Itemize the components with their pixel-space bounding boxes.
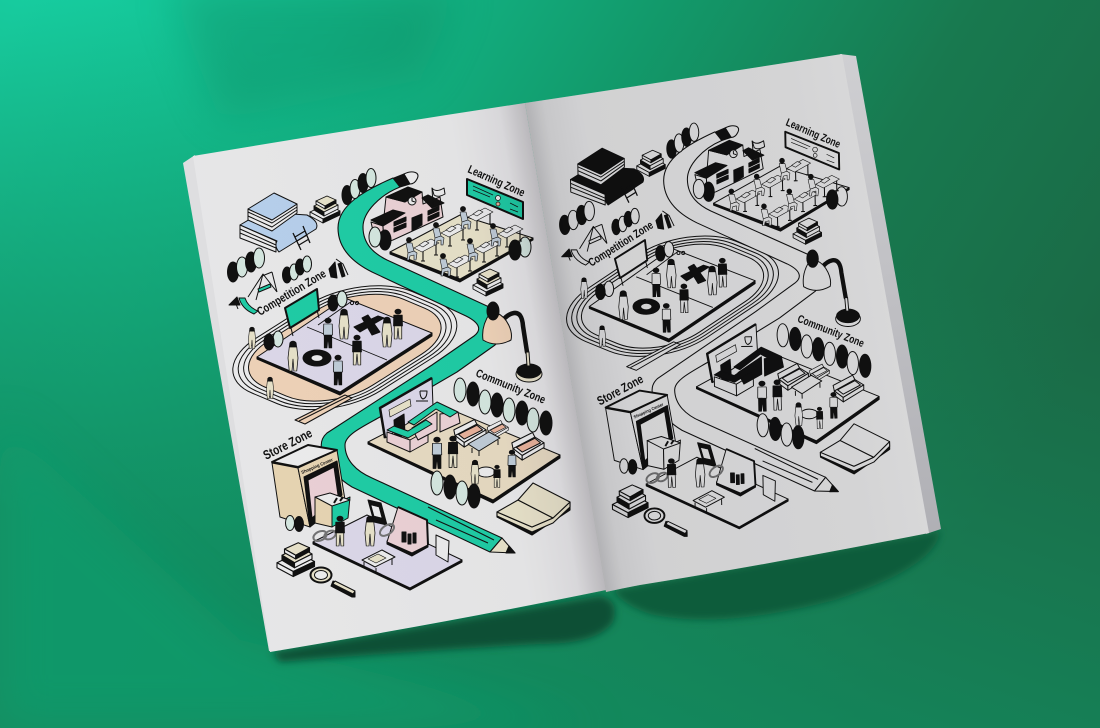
store zone	[272, 445, 462, 590]
bushes and playground	[557, 123, 701, 265]
book stack	[793, 218, 822, 244]
book stack	[277, 543, 314, 576]
right page illustration	[534, 115, 891, 539]
book shadows	[272, 531, 940, 662]
competition zone	[536, 220, 809, 373]
road ribbon ending in a pencil	[321, 172, 515, 553]
label: learning zone: Learning Zone	[466, 164, 526, 200]
store zone	[605, 388, 789, 531]
learning zone	[369, 179, 533, 282]
label: learning zone: Learning Zone	[784, 117, 842, 151]
community zone	[368, 378, 560, 508]
book stack	[612, 485, 648, 518]
labels: left page	[254, 164, 547, 475]
label: community zone: Community Zone	[796, 313, 866, 350]
label: competition zone: Competition Zone	[254, 266, 329, 319]
book stack	[636, 150, 665, 177]
book stack	[310, 196, 340, 223]
label: community zone: Community Zone	[474, 368, 547, 407]
open book	[820, 423, 890, 474]
right page	[525, 54, 929, 592]
label: store zone: Store Zone	[261, 425, 315, 463]
big stacked books	[570, 147, 644, 206]
learning zone	[692, 131, 850, 233]
bushes and playground	[228, 168, 376, 314]
big stacked books	[240, 193, 317, 252]
page shading	[193, 54, 929, 652]
open book pages	[183, 54, 941, 652]
magnifier	[310, 568, 355, 597]
left page illustration	[202, 164, 570, 597]
left page	[193, 103, 606, 652]
label: competition zone: Competition Zone	[587, 219, 656, 269]
community zone	[695, 322, 880, 450]
road outline ending in a pencil	[647, 124, 838, 494]
label: shopping center sign: Shopping Center	[300, 457, 334, 475]
label: store zone: Store Zone	[595, 372, 646, 408]
desk lamp	[483, 302, 542, 382]
labels: right page	[584, 116, 867, 420]
desk lamp	[803, 249, 861, 327]
magnifier	[644, 508, 687, 537]
label: shopping center sign: Shopping Center	[633, 402, 665, 420]
book stack	[473, 269, 503, 296]
competition zone	[202, 271, 487, 425]
open book	[497, 483, 570, 535]
page edges	[183, 54, 941, 651]
